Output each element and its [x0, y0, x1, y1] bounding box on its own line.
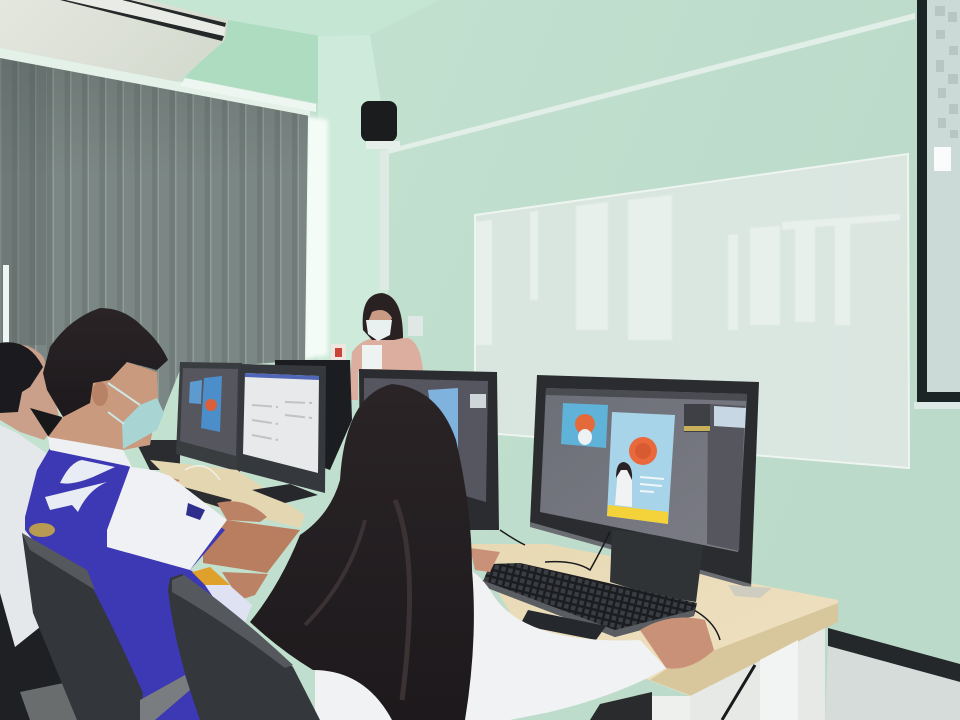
- conduit pipe: [380, 150, 389, 290]
- hand on keyboard: [217, 501, 267, 522]
- monitor: main: [530, 375, 759, 588]
- desk: main: [470, 544, 838, 720]
- wall speaker: [361, 101, 400, 149]
- wall switch: [408, 316, 423, 336]
- floor skirting: [828, 628, 960, 682]
- hand: [640, 618, 714, 669]
- whiteboard window reflections: [476, 195, 900, 345]
- ceiling: [150, 0, 440, 36]
- armrest: [140, 675, 190, 720]
- monitor: document: [237, 364, 326, 493]
- under-chair dark base: [0, 590, 78, 720]
- chair: boy: [22, 533, 190, 720]
- artboard: small: [561, 403, 608, 448]
- jersey: [25, 448, 250, 720]
- desk: back section: [150, 460, 305, 528]
- lower hand: [222, 572, 268, 600]
- sleeve badge: [186, 503, 205, 520]
- back tablet: [252, 484, 318, 503]
- student: front boy: [25, 308, 300, 720]
- mask: [122, 398, 164, 449]
- student: far left: [0, 342, 62, 647]
- air conditioner: [0, 0, 228, 82]
- monitor: far left: [176, 362, 242, 472]
- artboard: poster: [607, 412, 675, 524]
- jersey white blob: [60, 460, 115, 484]
- chair: girl: [168, 574, 320, 720]
- wall corner pillar: [318, 35, 388, 360]
- hair: [250, 384, 474, 720]
- side wall: [185, 20, 322, 104]
- window glow: [303, 116, 328, 360]
- back arm: [203, 520, 300, 573]
- whiteboard: [475, 154, 909, 468]
- neck and face: [48, 362, 158, 450]
- keyboard: [482, 563, 697, 637]
- floor: [825, 646, 960, 720]
- lower stripes: [195, 568, 252, 622]
- crest: [29, 523, 55, 537]
- blinds: [0, 48, 316, 420]
- projector screen: [914, 0, 960, 409]
- sleeve: [107, 467, 227, 570]
- phone: [520, 610, 606, 640]
- back keyboard: [178, 486, 232, 508]
- hair: [43, 308, 168, 417]
- student: girl: [250, 384, 714, 720]
- cable loop: [185, 466, 220, 480]
- cloth bag: [610, 530, 703, 602]
- dark area behind far desk: [135, 440, 180, 470]
- floor patch: [20, 680, 78, 720]
- panel swatches: [684, 404, 710, 432]
- far monitor dark: [275, 360, 352, 470]
- ear: [92, 382, 108, 406]
- jersey swoosh: [45, 482, 107, 512]
- trim rail: [388, 13, 915, 154]
- sweater: [315, 555, 666, 720]
- monitor stand base: [728, 585, 772, 598]
- teacher: [331, 293, 423, 400]
- monitor: centre: [359, 369, 499, 530]
- collar: [48, 437, 132, 467]
- cables: [500, 530, 755, 720]
